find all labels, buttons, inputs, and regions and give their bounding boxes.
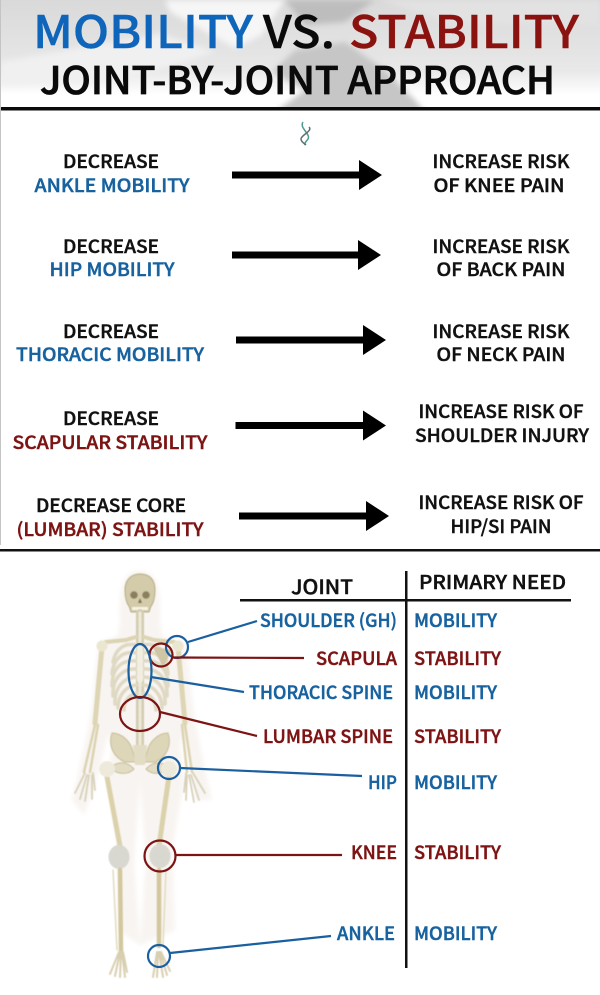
- row 1: ankle: OF KNEE PAIN: [434, 172, 564, 198]
- knees: [108, 845, 130, 869]
- row 3: thoracic: DECREASE: [63, 318, 159, 344]
- row: lumbar spine: LUMBAR SPINE: [263, 723, 393, 749]
- row 2: hip: DECREASE: [63, 233, 159, 259]
- arrow: [236, 410, 386, 440]
- table: joints and primary need: [240, 568, 571, 968]
- row 1: ankle: DECREASE: [63, 148, 159, 174]
- row: ankle: MOBILITY: [414, 920, 497, 946]
- row 5: core: DECREASE CORE: [36, 492, 186, 518]
- row: shoulder: MOBILITY: [414, 607, 497, 633]
- header background photo: [0, 0, 600, 112]
- row: hip: [368, 769, 497, 795]
- callout: scapula: [150, 644, 304, 666]
- clavicles and shoulders: [106, 637, 174, 642]
- row 5: core: [16, 489, 584, 542]
- scapula bone: [152, 646, 172, 667]
- row 4: scapular: DECREASE: [63, 405, 159, 431]
- row 3: thoracic: [16, 318, 570, 367]
- row 5: core: (LUMBAR) STABILITY: [16, 516, 204, 542]
- left page edge: [0, 0, 1, 545]
- row: knee: KNEE: [351, 839, 397, 865]
- arrow: [236, 325, 386, 355]
- row: ankle: [337, 920, 497, 946]
- row: knee: STABILITY: [414, 839, 501, 865]
- row 4: scapular: INCREASE RISK OF: [418, 398, 584, 424]
- lower leg bones: [120, 870, 159, 950]
- row: scapula: [316, 645, 501, 671]
- row: shoulder: SHOULDER (GH): [260, 607, 397, 633]
- table column headers: JOINT: [291, 571, 353, 600]
- row: knee: [351, 839, 501, 865]
- left foot: [110, 952, 127, 977]
- right hand: [184, 773, 205, 802]
- femurs: [107, 776, 169, 846]
- row 4: scapular: SCAPULAR STABILITY: [12, 429, 208, 455]
- joint callouts: circles and leader lines: [120, 621, 362, 967]
- row 1: ankle: [34, 148, 570, 198]
- callout: ankle: [148, 936, 331, 967]
- rib cage: [112, 644, 168, 710]
- skeleton illustration: [72, 571, 212, 977]
- arm bones: [84, 640, 192, 772]
- row 3: thoracic: OF NECK PAIN: [436, 341, 566, 367]
- row 2: hip: INCREASE RISK: [432, 233, 570, 259]
- row: hip: HIP: [368, 769, 397, 795]
- body silhouette: [72, 571, 212, 945]
- row 4: scapular: SHOULDER INJURY: [415, 422, 589, 448]
- row 1: ankle: ANKLE MOBILITY: [34, 172, 190, 198]
- arrow: [232, 240, 381, 270]
- left hand: [75, 773, 95, 801]
- row: lumbar spine: STABILITY: [414, 723, 501, 749]
- row: hip: MOBILITY: [414, 769, 497, 795]
- callout: thoracic spine: [128, 644, 244, 698]
- subtitle: JOINT-BY-JOINT APPROACH: [40, 50, 555, 105]
- row 2: hip: [50, 233, 570, 282]
- row: scapula: SCAPULA: [316, 645, 398, 671]
- callout: lumbar spine: [120, 697, 257, 736]
- arrow: [232, 160, 382, 190]
- icon: dna helix logo: [301, 122, 310, 145]
- row: thoracic spine: MOBILITY: [414, 679, 497, 705]
- table column headers: [291, 568, 566, 600]
- row: lumbar spine: [263, 723, 501, 749]
- pelvis: [110, 733, 170, 773]
- row: shoulder: [260, 607, 497, 633]
- callout: shoulder: [166, 621, 257, 658]
- row 1: ankle: INCREASE RISK: [432, 148, 570, 174]
- row 2: hip: HIP MOBILITY: [50, 256, 175, 282]
- skull: [125, 574, 155, 612]
- row: thoracic spine: THORACIC SPINE: [249, 679, 393, 705]
- callout: hip: [158, 757, 362, 779]
- row 3: thoracic: THORACIC MOBILITY: [16, 341, 204, 367]
- table column headers: PRIMARY NEED: [419, 568, 566, 595]
- row: thoracic spine: [249, 679, 497, 705]
- row: ankle: ANKLE: [337, 920, 395, 946]
- title: [33, 0, 580, 61]
- neck and spine: [136, 613, 144, 750]
- row 4: scapular: [12, 398, 589, 455]
- row: scapula: STABILITY: [414, 645, 501, 671]
- row 5: core: HIP/SI PAIN: [450, 513, 552, 539]
- panel: cause and effect rows: [12, 148, 589, 542]
- row 2: hip: OF BACK PAIN: [436, 256, 566, 282]
- arrow: [239, 501, 389, 531]
- row 3: thoracic: INCREASE RISK: [432, 318, 570, 344]
- right foot: [153, 952, 170, 977]
- row 5: core: INCREASE RISK OF: [418, 489, 584, 515]
- callout: knee: [144, 840, 342, 872]
